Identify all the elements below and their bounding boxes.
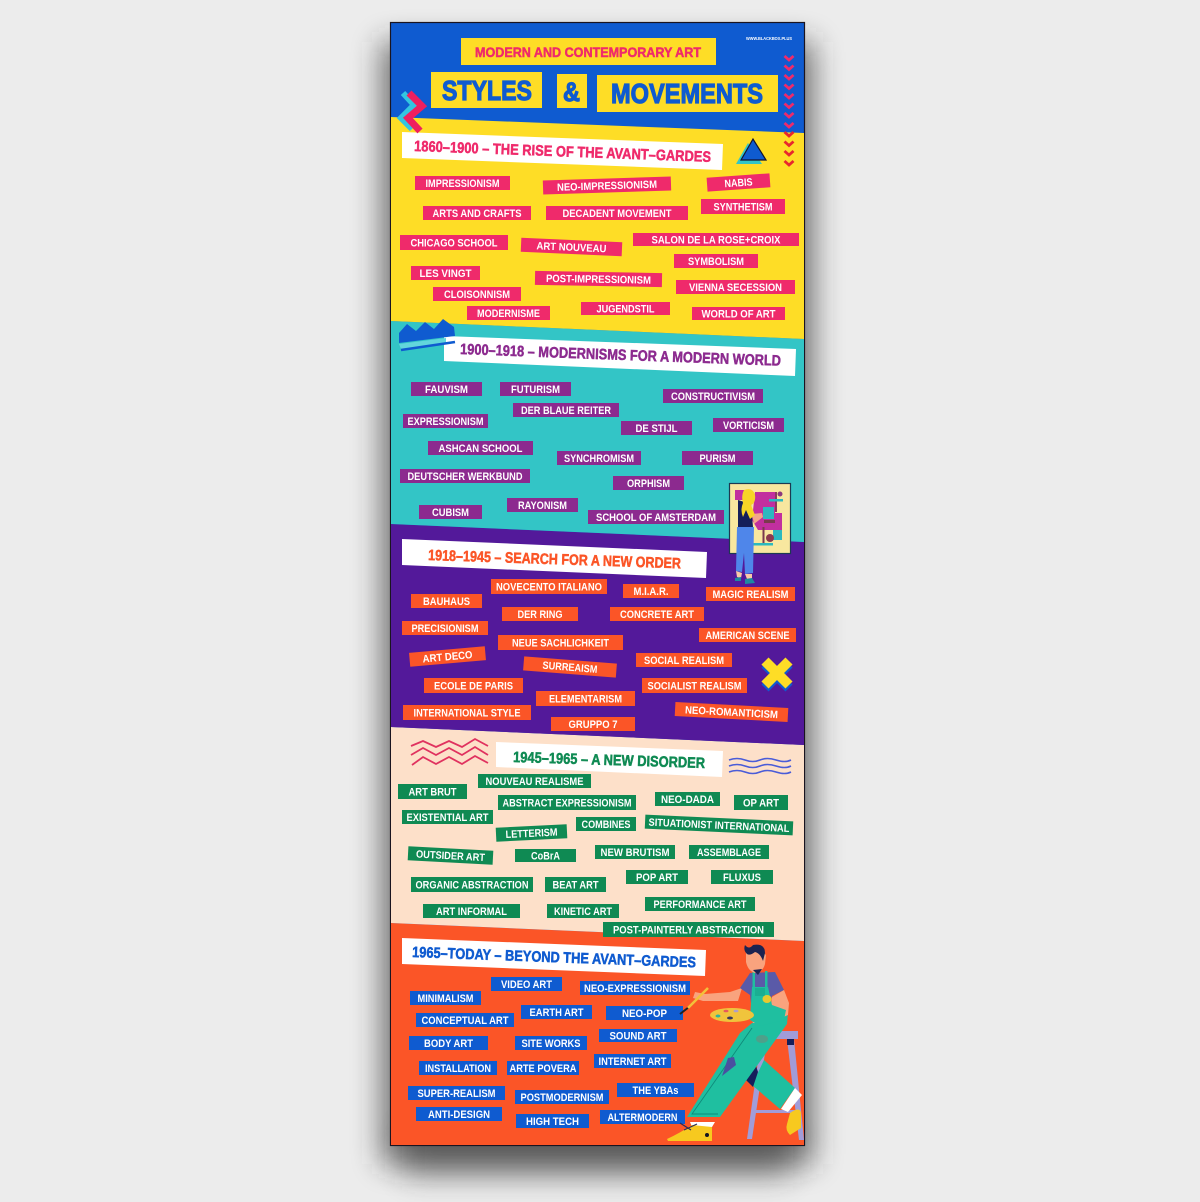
tag: new brutism: NEW BRUTISM [600, 847, 670, 859]
tag: anti-design: ANTI-DESIGN [428, 1109, 490, 1121]
icon: chevrons [784, 56, 794, 165]
tag: der ring [502, 607, 578, 621]
tag: ecole de paris: ECOLE DE PARIS [434, 680, 513, 692]
tag: fluxus [711, 870, 773, 884]
tag: rayonism [507, 498, 578, 512]
title block [431, 38, 778, 112]
palette [710, 1008, 754, 1022]
tag: precisionism: PRECISIONISM [412, 623, 479, 635]
tag: kinetic art: KINETIC ART [554, 906, 612, 918]
illustration: painter man [667, 945, 804, 1141]
tag: fauvism: FAUVISM [425, 384, 468, 396]
tag: neue sachlichkeit: NEUE SACHLICHKEIT [512, 637, 609, 649]
tag: school of amsterdam: SCHOOL OF AMSTERDAM [596, 512, 716, 524]
tag: arts and crafts: ARTS AND CRAFTS [432, 208, 522, 220]
stool [747, 1031, 804, 1140]
tag: les vingt [411, 266, 480, 280]
tag: bauhaus [411, 594, 482, 608]
paint stain [762, 995, 772, 1003]
tag: art brut [398, 784, 467, 799]
tag: synchromism: SYNCHROMISM [564, 453, 634, 465]
panel: 1945-1965 [391, 727, 804, 941]
tag: vorticism: VORTICISM [723, 420, 774, 432]
tag: post-impressionism: POST-IMPRESSIONISM [546, 273, 651, 287]
tag: art informal: ART INFORMAL [436, 906, 507, 918]
back leg [752, 1060, 795, 1109]
tag: neo-dada: NEO-DADA [661, 794, 714, 806]
tag: jugendstil [581, 302, 670, 315]
tag: site works: SITE WORKS [522, 1038, 580, 1050]
tag: american scene: AMERICAN SCENE [706, 630, 790, 642]
tag: op art: OP ART [743, 797, 779, 809]
tag: abstract expressionism: ABSTRACT EXPRESSIONISM [502, 797, 632, 809]
icon: crown [399, 319, 455, 350]
tag: neo-romanticism: NEO-ROMANTICISM [685, 704, 778, 721]
tag: performance art: PERFORMANCE ART [654, 899, 747, 911]
tag: situationist international: SITUATIONIST INTERNATIONAL [648, 817, 790, 835]
tag: nabis: NABIS [724, 176, 753, 190]
heading: 1918-1945: 1918–1945 – SEARCH FOR A NEW ORDER [428, 547, 681, 572]
tag: synthetism [701, 199, 785, 214]
tag: salon de la rose+croix: SALON DE LA ROSE+CROIX [652, 234, 780, 246]
panel: 1965-today [391, 923, 804, 1145]
tag: video art [491, 977, 562, 991]
tag: earth art: EARTH ART [530, 1007, 584, 1019]
icon: yellow cross [765, 661, 789, 688]
tag: elementarism [536, 691, 635, 706]
illustration: woman painting [730, 484, 790, 584]
right shoe [786, 1110, 801, 1135]
tag: altermodern: ALTERMODERN [608, 1112, 678, 1124]
tag: art deco: ART DECO [422, 649, 473, 665]
tag: expressionism: EXPRESSIONISM [408, 416, 484, 428]
tag: les vingt: LES VINGT [420, 268, 472, 280]
heading: 1965-today [402, 938, 706, 976]
tag: de stijl: DE STIJL [636, 423, 678, 435]
right arm [750, 990, 789, 1023]
tag: nouveau realisme: NOUVEAU REALISME [486, 776, 584, 788]
tag: concrete art: CONCRETE ART [620, 609, 694, 621]
tag: jugendstil: JUGENDSTIL [596, 303, 655, 315]
left shoe [690, 1122, 715, 1127]
tag: vienna secession: VIENNA SECESSION [689, 282, 782, 294]
tag: fauvism [411, 382, 482, 396]
tag: anti-design [416, 1107, 502, 1121]
tag: cubism: CUBISM [432, 507, 469, 519]
front leg [687, 1013, 788, 1117]
panel: 1860-1900 [391, 117, 804, 339]
tag: orphism [613, 476, 684, 490]
shirt [740, 972, 784, 1012]
tag: cobra: CoBrA [531, 850, 560, 862]
subtitle [461, 38, 716, 65]
tag: high tech: HIGH TECH [526, 1116, 579, 1128]
tag: outsider art: OUTSIDER ART [416, 849, 486, 864]
tag: m.i.a.r. [623, 584, 679, 598]
tag: surreaism: SURREAISM [542, 660, 598, 676]
tag: art nouveau [521, 238, 622, 256]
tag: chicago school: CHICAGO SCHOOL [410, 237, 498, 249]
tag: the ybas [617, 1083, 694, 1097]
tag: impressionism: IMPRESSIONISM [426, 178, 500, 190]
tag: video art: VIDEO ART [501, 979, 552, 991]
title word: movements: MOVEMENTS [611, 78, 763, 109]
tag: deutscher werkbund: DEUTSCHER WERKBUND [408, 471, 523, 483]
tag: minimalism: MINIMALISM [418, 993, 474, 1005]
title ampersand: & [563, 77, 580, 107]
tag: world of art: WORLD OF ART [702, 308, 776, 320]
brush [680, 1007, 689, 1014]
tag: gruppo 7: GRUPPO 7 [568, 719, 618, 731]
tag: conceptual art: CONCEPTUAL ART [422, 1015, 509, 1027]
tag: high tech [516, 1114, 589, 1128]
heading: 1860-1900: 1860–1900 – THE RISE OF THE AVANT–GARDES [414, 138, 711, 166]
tag: super-realism: SUPER-REALISM [418, 1088, 496, 1100]
tag: op art [734, 795, 788, 810]
heading: 1860-1900 [402, 132, 723, 170]
left arm [693, 988, 742, 1001]
tag: cloisonnism: CLOISONNISM [444, 289, 510, 301]
title ampersand [557, 74, 587, 108]
tag: body art [409, 1036, 488, 1050]
tag: nabis [707, 173, 770, 192]
tag: existential art: EXISTENTIAL ART [406, 812, 489, 824]
tag: body art: BODY ART [424, 1038, 473, 1050]
icon: double zigzag [401, 93, 422, 131]
tag: neo-pop: NEO-POP [622, 1008, 667, 1020]
tag: cubism [419, 505, 482, 519]
tag: der blaue reiter: DER BLAUE REITER [521, 405, 611, 417]
tag: art nouveau: ART NOUVEAU [536, 240, 607, 255]
tag: rayonism: RAYONISM [518, 500, 567, 512]
tag: purism: PURISM [700, 453, 736, 465]
tag: assemblage: ASSEMBLAGE [697, 847, 761, 859]
website url: WWW.BLACKBOX.PLUS [746, 36, 792, 41]
tag: surreaism [523, 656, 617, 678]
tag: der ring: DER RING [518, 609, 562, 621]
heading: 1900-1918 [444, 336, 796, 376]
tag: decadent movement: DECADENT MOVEMENT [562, 208, 672, 220]
tag: arte povera: ARTE POVERA [510, 1063, 577, 1075]
tag: elementarism: ELEMENTARISM [549, 693, 622, 705]
heading: 1918-1945 [402, 539, 707, 578]
subtitle: MODERN AND CONTEMPORARY ART [475, 44, 701, 60]
icon: triangle [736, 139, 766, 164]
head [746, 950, 766, 973]
tag: internet art: INTERNET ART [598, 1056, 667, 1068]
tag: organic abstraction: ORGANIC ABSTRACTION [416, 879, 528, 891]
tag: modernisme: MODERNISME [477, 308, 540, 320]
tag: socialist realism: SOCIALIST REALISM [648, 680, 742, 692]
tag: post-painterly abstraction: POST-PAINTERLY ABSTRACTION [613, 924, 764, 936]
title word: styles: STYLES [442, 75, 532, 106]
tag: the ybas: THE YBAs [632, 1085, 679, 1097]
tag: art deco [409, 646, 486, 667]
tag: gruppo 7 [551, 717, 635, 731]
tag: neo-expressionism: NEO-EXPRESSIONISM [584, 983, 686, 995]
heading: 1900-1918: 1900–1918 – MODERNISMS FOR A MODERN WORLD [460, 341, 781, 370]
tag: futurism: FUTURISM [511, 384, 560, 396]
tag: beat art: BEAT ART [552, 879, 599, 891]
icon: blue wave lines [729, 758, 791, 774]
tag: postmodernism: POSTMODERNISM [520, 1092, 604, 1104]
tag: fluxus: FLUXUS [723, 872, 761, 884]
panel: 1918-1945 [391, 524, 804, 745]
tag: orphism: ORPHISM [627, 478, 670, 490]
tag: constructivism: CONSTRUCTIVISM [671, 391, 755, 403]
tag: international style: INTERNATIONAL STYLE [414, 707, 520, 719]
tag: neo-pop [606, 1006, 683, 1020]
tag: social realism: SOCIAL REALISM [644, 655, 724, 667]
apron [750, 971, 786, 1026]
heading: 1945-1965: 1945–1965 – A NEW DISORDER [513, 749, 705, 772]
tag: purism [682, 451, 753, 465]
tag: synthetism: SYNTHETISM [714, 201, 773, 213]
tag: symbolism: SYMBOLISM [688, 256, 744, 268]
tag: art brut: ART BRUT [408, 786, 457, 798]
tag: symbolism [674, 254, 758, 268]
poster [390, 22, 804, 1146]
tag: cobra [515, 849, 576, 862]
tag: bauhaus: BAUHAUS [423, 596, 470, 608]
tag: installation: INSTALLATION [425, 1063, 491, 1075]
heading: 1945-1965 [496, 742, 723, 777]
tag: magic realism: MAGIC REALISM [712, 589, 789, 601]
panel: 1900-1918 [391, 321, 804, 542]
tag: m.i.a.r.: M.I.A.R. [634, 586, 669, 598]
tag: pop art [626, 870, 688, 884]
tag: futurism [500, 382, 571, 396]
tag: combines: COMBINES [582, 819, 630, 831]
tag: ashcan school: ASHCAN SCHOOL [438, 443, 523, 455]
tag: beat art [545, 877, 606, 892]
tag: neo-impressionism: NEO-IMPRESSIONISM [557, 179, 657, 194]
heading: 1965-today: 1965–TODAY – BEYOND THE AVANT–GARDES [412, 944, 696, 971]
tag: pop art: POP ART [636, 872, 678, 884]
tag: de stijl [621, 421, 692, 435]
tag: letterism: LETTERISM [505, 827, 558, 841]
tag: novecento italiano: NOVECENTO ITALIANO [496, 581, 602, 593]
tag: sound art: SOUND ART [610, 1030, 667, 1042]
icon: red zigzag lines [411, 739, 488, 765]
